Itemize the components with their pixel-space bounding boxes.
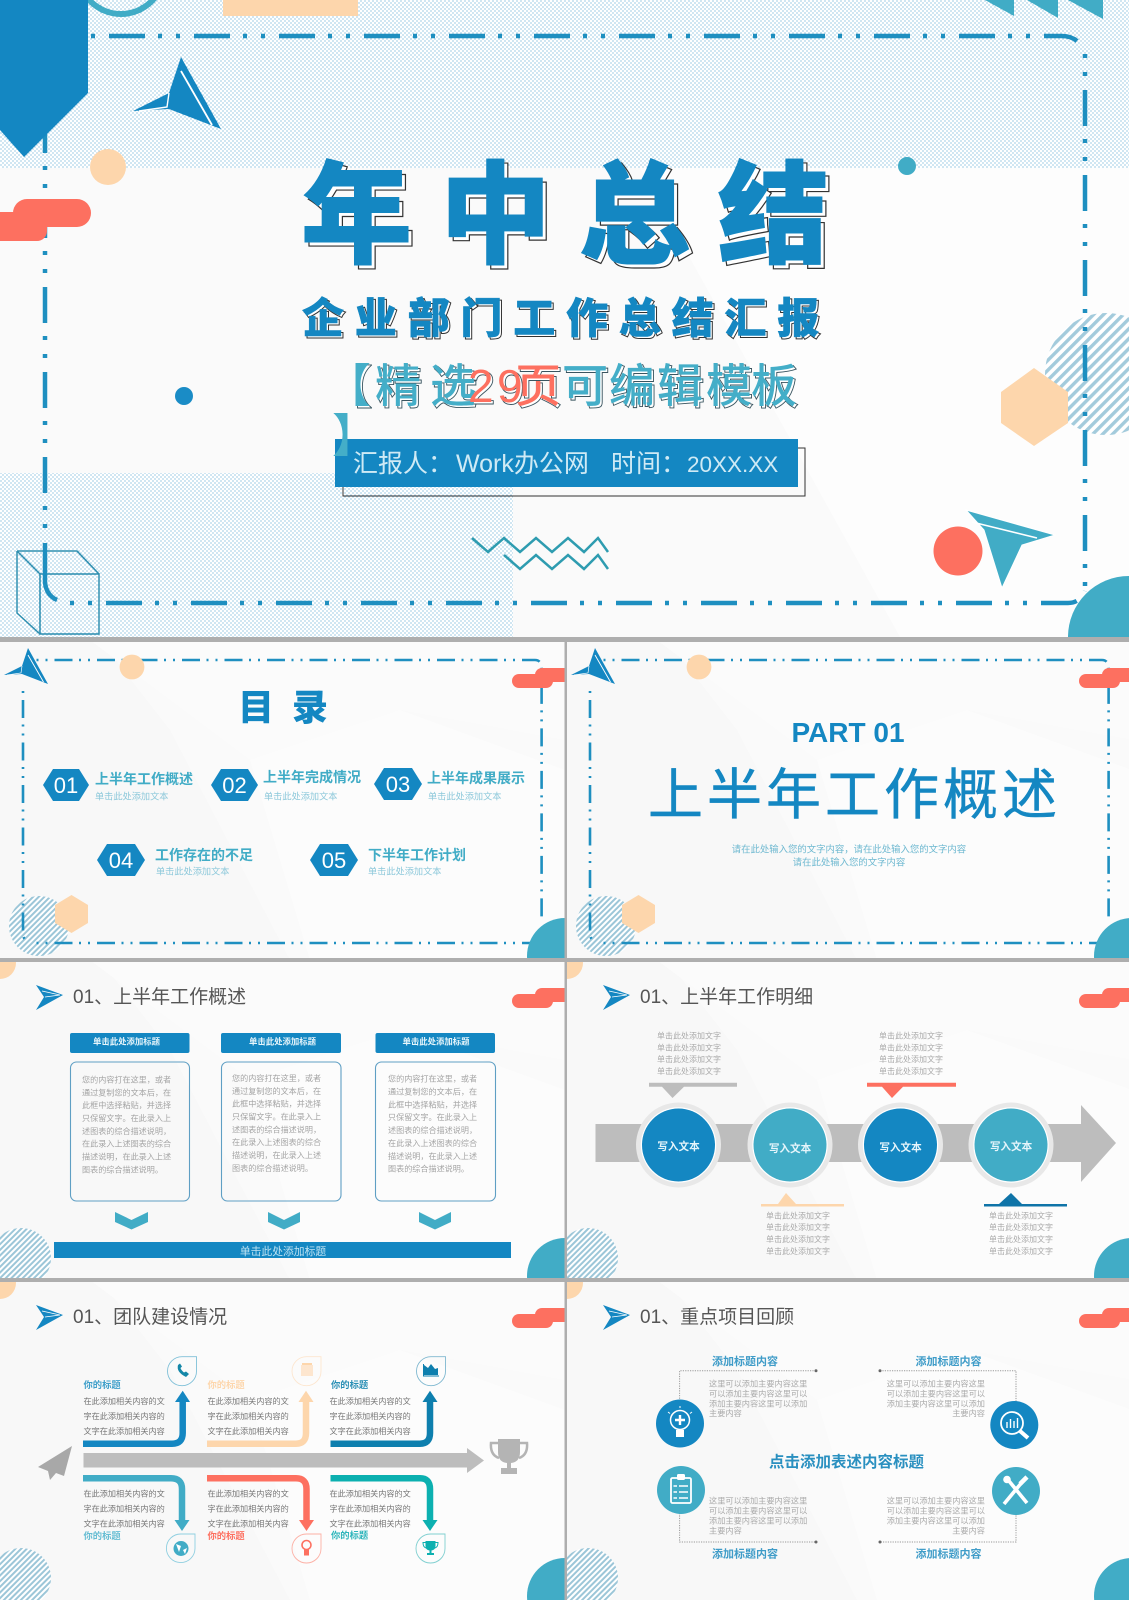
text block bottom 3: 字在此添加相关内容的 xyxy=(330,1503,411,1513)
text block bottom 1: 字在此添加相关内容的 xyxy=(84,1503,165,1513)
striped circle xyxy=(0,1548,51,1600)
column 1: 此框中选择粘贴，并选择 xyxy=(82,1100,171,1110)
item 03: 单击此处添加文本 xyxy=(428,790,502,802)
icon: paper plane xyxy=(4,648,48,684)
arrow down 1 xyxy=(83,1478,190,1531)
peach corner xyxy=(0,947,16,979)
item 05: 单击此处添加文本 xyxy=(368,866,442,876)
tagline: 选 xyxy=(432,362,478,414)
text block top 1: 在此添加相关内容的文 xyxy=(84,1396,165,1406)
block bottom left: 这里可以添加主要内容这里 xyxy=(709,1495,807,1505)
node 4: 写入文本 xyxy=(990,1140,1033,1153)
text block top 1 xyxy=(84,1379,165,1436)
column 3: 此框中选择粘贴，并选择 xyxy=(388,1099,477,1109)
item 04: 工作存在的不足 xyxy=(155,847,253,863)
text block top 1: 字在此添加相关内容的 xyxy=(84,1411,165,1421)
block top left: 添加标题内容 xyxy=(712,1354,778,1368)
item 01: 单击此处添加文本 xyxy=(95,790,168,802)
reporter box: 汇报人： xyxy=(353,450,453,478)
text block top 3: 文字在此添加相关内容 xyxy=(330,1426,411,1436)
callout bottom 1: 单击此处添加文字 xyxy=(766,1234,830,1244)
column 1: 图表的综合描述说明。 xyxy=(82,1164,163,1174)
icon: area chart xyxy=(417,1357,446,1386)
slide 4: overview xyxy=(0,947,603,1314)
peach corner xyxy=(551,947,583,979)
callout top 2: 单击此处添加文字 xyxy=(879,1042,943,1052)
text block bottom 2 xyxy=(208,1488,289,1541)
coral pill xyxy=(0,199,91,241)
text block top 1: 你的标题 xyxy=(84,1379,121,1390)
tagline: 【 xyxy=(327,362,373,414)
column 2: 描述说明，在此录入上述 xyxy=(232,1150,321,1160)
timeline arrow xyxy=(596,1105,1116,1182)
section description: 请在此处输入您的文字内容，请在此处输入您的文字内容 xyxy=(732,844,966,854)
tagline: 编 xyxy=(611,362,657,414)
node 1 xyxy=(636,1102,721,1188)
callout bottom 2 xyxy=(984,1193,1067,1256)
text block top 1: 文字在此添加相关内容 xyxy=(84,1426,165,1436)
slide background xyxy=(567,640,1129,960)
item 02: 上半年完成情况 xyxy=(263,769,361,785)
callout bottom 1: 单击此处添加文字 xyxy=(766,1210,830,1220)
peach circle xyxy=(687,655,711,679)
icon: paper plane xyxy=(36,985,63,1010)
column 2: 只保留文字。在此录入上 xyxy=(232,1112,321,1122)
section description xyxy=(732,844,966,868)
item 04: 04 xyxy=(109,848,133,873)
text block bottom 2: 字在此添加相关内容的 xyxy=(208,1503,289,1513)
tagline: 选 xyxy=(430,360,476,412)
block top right: 添加标题内容 xyxy=(916,1354,982,1368)
text block bottom 1: 在此添加相关内容的文 xyxy=(84,1488,165,1498)
callout bottom 2: 单击此处添加文字 xyxy=(989,1210,1053,1220)
striped circle xyxy=(558,1228,618,1288)
title: 年中总结 xyxy=(301,154,857,278)
callout bottom 2: 单击此处添加文字 xyxy=(989,1234,1053,1244)
part label: PART 01 xyxy=(791,717,905,748)
teal circle xyxy=(1094,918,1129,994)
block top right: 可以添加主要内容这里可以 xyxy=(887,1388,985,1398)
block bottom left: 添加标题内容 xyxy=(712,1546,778,1560)
block bottom left: 可以添加主要内容这里可以 xyxy=(709,1505,807,1515)
arrow up 2 xyxy=(207,1391,314,1444)
column 3: 您的内容打在这里，或者 xyxy=(388,1074,477,1084)
block bottom left: 添加主要内容这里可以添加 xyxy=(709,1515,807,1525)
teal circle xyxy=(527,1558,603,1600)
peach hexagon xyxy=(55,895,88,933)
title: 年中总结 xyxy=(305,158,861,282)
icon: tools circle xyxy=(992,1467,1040,1515)
teal circle xyxy=(1094,1238,1129,1314)
item 02: 02 xyxy=(222,773,247,798)
block top left: 这里可以添加主要内容这里 xyxy=(709,1378,807,1388)
arrow up 1 xyxy=(83,1391,190,1444)
column 3: 只保留文字。在此录入上 xyxy=(388,1112,477,1122)
node 4 xyxy=(968,1102,1054,1188)
tagline: 9 xyxy=(497,360,523,412)
cover background xyxy=(0,0,1129,637)
banner xyxy=(0,0,88,157)
slide 2: contents xyxy=(4,648,564,958)
column 2: 述图表的综合描述说明， xyxy=(232,1124,321,1134)
icon: paper plane xyxy=(36,1305,63,1330)
tagline: 页 xyxy=(515,360,561,412)
text block top 2 xyxy=(208,1379,289,1436)
heading: 01、重点项目回顾 xyxy=(640,1306,794,1328)
node 3 xyxy=(858,1102,943,1188)
teal circle xyxy=(527,918,564,958)
slide 6: team xyxy=(0,1267,603,1600)
column 1: 在此录入上述图表的综合 xyxy=(82,1139,171,1149)
column 3 xyxy=(376,1033,496,1230)
icon: globe xyxy=(166,1534,195,1563)
peach corner xyxy=(0,1267,16,1299)
text block top 3: 在此添加相关内容的文 xyxy=(330,1396,411,1406)
slide 1: cover xyxy=(0,0,1129,698)
block top right: 添加主要内容这里可以添加 xyxy=(887,1398,985,1408)
text block bottom 1: 文字在此添加相关内容 xyxy=(84,1518,165,1528)
text block top 2: 在此添加相关内容的文 xyxy=(208,1396,289,1406)
column 2: 单击此处添加标题 xyxy=(249,1036,317,1046)
callout bottom 2: 单击此处添加文字 xyxy=(989,1246,1053,1256)
block top right: 主要内容 xyxy=(952,1408,985,1418)
summary bar: 单击此处添加标题 xyxy=(240,1244,326,1258)
icon: gray plane xyxy=(38,1446,72,1480)
decoration: top shapes xyxy=(78,0,1103,19)
item 05: 下半年工作计划 xyxy=(368,847,466,863)
striped circle xyxy=(1045,313,1129,435)
coral pill xyxy=(512,1308,575,1328)
subtitle: 企业部门工作总结汇报 xyxy=(304,297,832,344)
icon: cube xyxy=(17,551,99,634)
tagline xyxy=(356,362,798,409)
icon: paper plane xyxy=(603,985,630,1010)
tagline: 精 xyxy=(377,362,423,414)
heading: 目录 xyxy=(238,687,346,728)
block bottom right: 添加标题内容 xyxy=(916,1546,982,1560)
tagline: 可 xyxy=(564,362,610,414)
coral pill xyxy=(512,988,575,1008)
node 2: 写入文本 xyxy=(769,1142,812,1155)
node 1: 写入文本 xyxy=(657,1140,700,1153)
text block bottom 2: 文字在此添加相关内容 xyxy=(208,1518,289,1528)
striped circle xyxy=(558,1548,618,1600)
icon: calendar xyxy=(292,1357,321,1386)
teal circle xyxy=(527,1238,603,1314)
column 2: 此框中选择粘贴，并选择 xyxy=(232,1099,321,1109)
slide background xyxy=(0,640,565,960)
column 3: 单击此处添加标题 xyxy=(402,1036,470,1046)
icon: magnifier circle xyxy=(990,1401,1038,1449)
text block bottom 3: 文字在此添加相关内容 xyxy=(330,1518,411,1528)
column 2 xyxy=(221,1033,341,1230)
zigzag xyxy=(472,538,608,569)
striped circle xyxy=(576,896,636,956)
column 3: 描述说明，在此录入上述 xyxy=(388,1151,477,1161)
icon: phone xyxy=(168,1357,197,1386)
slide background xyxy=(567,1280,1129,1600)
item 03: 03 xyxy=(386,772,410,797)
column 3: 述图表的综合描述说明， xyxy=(388,1125,477,1135)
heading: 01、上半年工作概述 xyxy=(73,986,246,1008)
peach hexagon xyxy=(1001,368,1068,446)
block bottom right: 添加主要内容这里可以添加 xyxy=(887,1515,985,1525)
dashed frame xyxy=(45,36,1085,603)
tagline: 页 xyxy=(517,362,563,414)
item 05 xyxy=(310,844,466,876)
icon: bulb circle xyxy=(656,1400,704,1448)
node 2 xyxy=(748,1102,832,1188)
callout top 2: 单击此处添加文字 xyxy=(879,1030,943,1040)
peach hexagon xyxy=(622,895,655,933)
text block bottom 1: 你的标题 xyxy=(84,1530,121,1541)
column 2: 图表的综合描述说明。 xyxy=(232,1163,313,1173)
tagline: 板 xyxy=(753,362,799,414)
tagline: 2 xyxy=(470,362,496,414)
reporter box: Work办公网 xyxy=(456,450,589,478)
item 02: 单击此处添加文本 xyxy=(264,790,338,802)
block top left xyxy=(709,1354,807,1418)
block top left: 可以添加主要内容这里可以 xyxy=(709,1388,807,1398)
item 03: 上半年成果展示 xyxy=(427,770,525,786)
tagline: 板 xyxy=(751,360,797,412)
callout top 2: 单击此处添加文字 xyxy=(879,1066,943,1076)
callout top 1: 单击此处添加文字 xyxy=(657,1054,721,1064)
slide 5: timeline xyxy=(551,947,1129,1314)
column 1: 单击此处添加标题 xyxy=(93,1036,161,1046)
item 05: 05 xyxy=(322,848,346,873)
column 1: 您的内容打在这里，或者 xyxy=(82,1074,171,1084)
text block top 3: 你的标题 xyxy=(331,1379,369,1390)
slide 3: part 01 xyxy=(571,648,1129,958)
striped circle xyxy=(9,896,69,956)
center heading: 点击添加表述内容标题 xyxy=(769,1452,925,1471)
icon: light bulb xyxy=(292,1534,321,1563)
coral pill xyxy=(1079,668,1129,688)
column 2: 您的内容打在这里，或者 xyxy=(232,1073,321,1083)
tagline: 模 xyxy=(706,360,752,412)
closing bracket: 】 xyxy=(332,410,378,462)
icon: paper plane xyxy=(571,648,615,684)
reporter box: 时间： xyxy=(611,450,686,478)
column 2: 在此录入上述图表的综合 xyxy=(232,1137,321,1147)
teal circle xyxy=(1094,1558,1129,1600)
text block bottom 2: 在此添加相关内容的文 xyxy=(208,1488,289,1498)
reporter box xyxy=(335,439,805,496)
column 1: 通过复制您的文本后，在 xyxy=(82,1087,171,1097)
text block top 2: 字在此添加相关内容的 xyxy=(208,1411,289,1421)
column 1: 描述说明，在此录入上述 xyxy=(82,1152,171,1162)
coral pill xyxy=(1079,1308,1129,1328)
text block bottom 3: 在此添加相关内容的文 xyxy=(330,1488,411,1498)
text block bottom 3 xyxy=(330,1488,411,1540)
tagline: 精 xyxy=(375,360,421,412)
text block bottom 2: 你的标题 xyxy=(208,1530,245,1541)
teal dot xyxy=(898,157,916,175)
peach circle xyxy=(120,655,144,679)
tagline: 【 xyxy=(325,360,371,412)
block top right: 这里可以添加主要内容这里 xyxy=(887,1378,985,1388)
callout bottom 1: 单击此处添加文字 xyxy=(766,1246,830,1256)
block top right xyxy=(887,1354,985,1418)
peach circle xyxy=(90,149,126,185)
subtitle: 企业部门工作总结汇报 xyxy=(302,295,830,342)
callout top 1: 单击此处添加文字 xyxy=(657,1042,721,1052)
column 2: 通过复制您的文本后，在 xyxy=(232,1086,321,1096)
callout bottom 2: 单击此处添加文字 xyxy=(989,1222,1053,1232)
column 1: 只保留文字。在此录入上 xyxy=(82,1113,171,1123)
node 3: 写入文本 xyxy=(879,1141,922,1154)
item 03 xyxy=(374,768,525,802)
tagline: 9 xyxy=(499,362,525,414)
arrow down 3 xyxy=(330,1478,438,1531)
text block top 3 xyxy=(330,1379,411,1436)
column 3: 在此录入上述图表的综合 xyxy=(388,1138,477,1148)
slide background xyxy=(567,960,1129,1280)
connector dots xyxy=(814,1369,882,1544)
item 02 xyxy=(211,769,361,802)
item 01: 上半年工作概述 xyxy=(95,771,193,787)
coral pill xyxy=(512,668,564,688)
text block bottom 3: 你的标题 xyxy=(331,1530,369,1540)
blue dot xyxy=(175,387,193,405)
column 3: 图表的综合描述说明。 xyxy=(388,1164,469,1174)
teal quarter circle xyxy=(1068,576,1129,637)
block bottom left xyxy=(709,1495,807,1560)
block top left: 添加主要内容这里可以添加 xyxy=(709,1398,807,1408)
text block top 3: 字在此添加相关内容的 xyxy=(330,1411,411,1421)
reporter box: 20XX.XX xyxy=(687,452,778,477)
text block top 2: 你的标题 xyxy=(208,1379,245,1390)
section title: 上半年工作概述 xyxy=(648,764,1061,826)
slide 7: key projects xyxy=(551,1267,1129,1600)
section description: 请在此处输入您的文字内容 xyxy=(793,856,905,868)
tagline: 模 xyxy=(708,362,754,414)
icon: paper plane xyxy=(603,1305,630,1330)
block bottom right: 可以添加主要内容这里可以 xyxy=(887,1505,985,1515)
column 1: 述图表的综合描述说明， xyxy=(82,1126,171,1136)
callout top 2: 单击此处添加文字 xyxy=(879,1054,943,1064)
block bottom left: 主要内容 xyxy=(709,1525,742,1535)
text block bottom 1 xyxy=(84,1488,165,1541)
peach corner xyxy=(551,1267,583,1299)
dashed frame xyxy=(590,660,1109,943)
column 1 xyxy=(70,1033,190,1230)
icon: paper plane teal xyxy=(966,510,1055,588)
item 01 xyxy=(43,769,193,802)
heading: 01、团队建设情况 xyxy=(73,1306,227,1328)
callout top 1 xyxy=(649,1030,737,1098)
arrow up 3 xyxy=(330,1391,438,1444)
column 3: 通过复制您的文本后，在 xyxy=(388,1086,477,1096)
dotted connectors xyxy=(680,1371,1016,1542)
tagline: 辑 xyxy=(659,362,705,414)
separators xyxy=(0,637,1129,1600)
tagline: 可 xyxy=(562,360,608,412)
callout bottom 1: 单击此处添加文字 xyxy=(766,1222,830,1232)
block bottom right: 主要内容 xyxy=(952,1525,985,1535)
slide background xyxy=(0,960,565,1280)
item 01: 01 xyxy=(54,773,78,798)
tagline: 辑 xyxy=(657,360,703,412)
item 04 xyxy=(97,844,253,876)
tagline: 编 xyxy=(609,360,655,412)
icon: clipboard circle xyxy=(657,1466,705,1514)
callout bottom 1 xyxy=(761,1193,844,1256)
block bottom right: 这里可以添加主要内容这里 xyxy=(887,1495,985,1505)
summary bar xyxy=(54,1242,511,1258)
callout top 1: 单击此处添加文字 xyxy=(657,1066,721,1076)
callout top 1: 单击此处添加文字 xyxy=(657,1030,721,1040)
striped circle xyxy=(0,1228,51,1288)
block bottom right xyxy=(887,1495,985,1560)
coral pill xyxy=(1079,988,1129,1008)
coral circle xyxy=(934,526,982,576)
item 04: 单击此处添加文本 xyxy=(156,866,230,876)
callout top 2 xyxy=(867,1030,956,1098)
block top left: 主要内容 xyxy=(709,1408,742,1418)
slide background xyxy=(0,1280,565,1600)
text block top 2: 文字在此添加相关内容 xyxy=(208,1426,289,1436)
icon: paper plane blue xyxy=(133,57,221,129)
dashed frame xyxy=(23,660,542,943)
icon: trophy xyxy=(416,1534,445,1563)
icon: gray trophy xyxy=(491,1439,527,1474)
central arrow xyxy=(84,1448,484,1473)
tagline: 2 xyxy=(468,360,494,412)
heading: 01、上半年工作明细 xyxy=(640,986,813,1008)
arrow down 2 xyxy=(207,1478,314,1531)
